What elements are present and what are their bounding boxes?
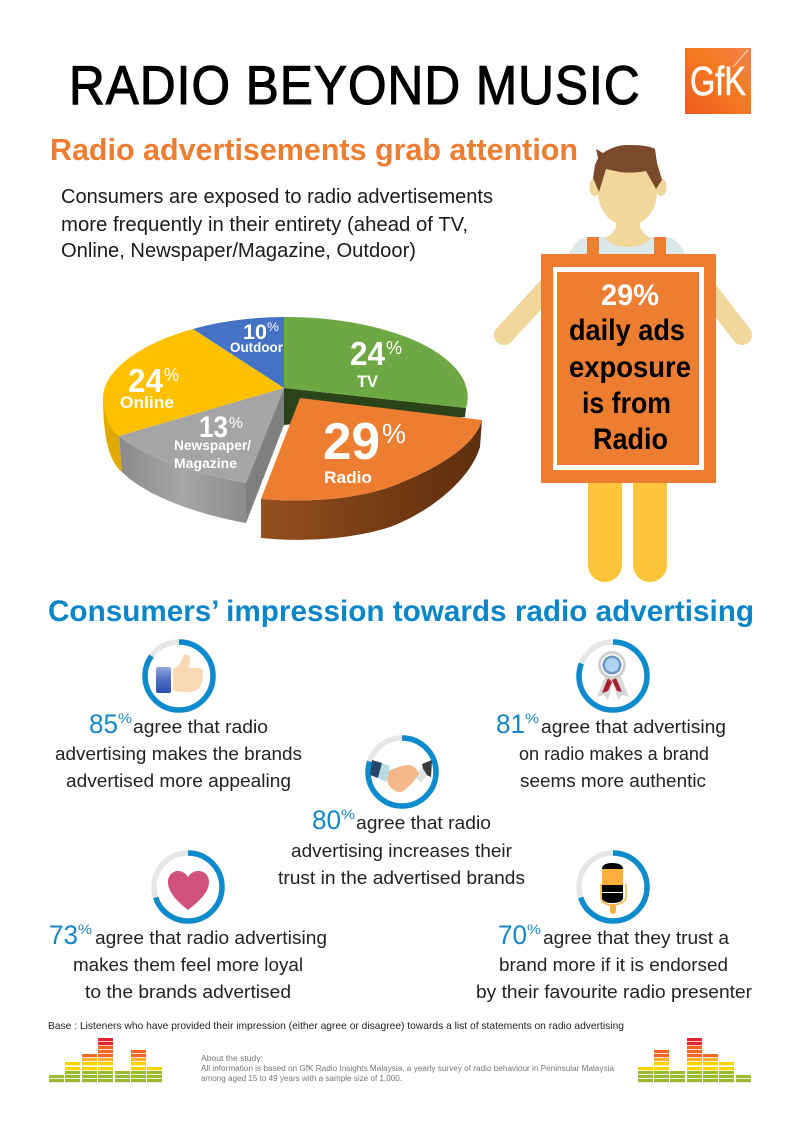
label: TV 24% bbox=[350, 335, 402, 391]
stat text: % bbox=[118, 710, 132, 726]
heading: radio advertisements: Radio advertisements grab attention bbox=[50, 132, 578, 167]
stat text: agree that radio bbox=[133, 717, 268, 737]
hair bbox=[593, 145, 662, 192]
stat text: on radio makes a brand bbox=[519, 744, 709, 764]
label: radio 29% bbox=[323, 413, 406, 487]
stat text: agree that radio bbox=[356, 813, 491, 833]
label: online 24%: Online bbox=[120, 393, 174, 412]
stat text: by their favourite radio presenter bbox=[476, 982, 752, 1002]
slice: radio bbox=[261, 398, 482, 540]
stat text: advertising increases their bbox=[291, 841, 512, 861]
stat: 85% more appealing bbox=[55, 642, 302, 791]
head bbox=[590, 165, 666, 226]
label: online 24%: % bbox=[164, 365, 179, 385]
stat text bbox=[476, 920, 752, 1002]
sign text: 29% bbox=[601, 279, 659, 312]
icon: heart ring bbox=[154, 853, 222, 921]
sign board bbox=[541, 254, 716, 483]
slice: TV bbox=[284, 317, 468, 425]
stat text: % bbox=[341, 806, 355, 822]
stat text: agree that radio advertising bbox=[95, 928, 327, 948]
stat text bbox=[278, 805, 525, 888]
stat: 70% presenter endorsement bbox=[476, 853, 752, 1002]
stat text: brand more if it is endorsed bbox=[499, 955, 728, 975]
stat text: % bbox=[527, 921, 541, 937]
label: outdoor 10%: Outdoor bbox=[230, 340, 284, 355]
stat text: agree that they trust a bbox=[543, 928, 730, 948]
label: TV 24%: 24 bbox=[350, 335, 386, 372]
stat text: agree that advertising bbox=[541, 717, 726, 737]
text block: about the study bbox=[201, 1054, 615, 1083]
icon: handshake ring bbox=[368, 738, 436, 806]
label: newspaper and magazine 13%: Newspaper/ bbox=[174, 438, 251, 453]
icon: left equalizer bars bbox=[49, 1038, 162, 1082]
label: newspaper and magazine 13%: Magazine bbox=[174, 456, 238, 471]
logo: GfK: GfK bbox=[690, 58, 746, 104]
label: newspaper and magazine 13%: 13 bbox=[199, 411, 228, 444]
heading: consumers' impression: Consumers’ impression towards radio advertising bbox=[48, 595, 754, 628]
stat text: 73 bbox=[49, 920, 78, 950]
stat text: % bbox=[78, 921, 92, 937]
logo: GfK bbox=[685, 48, 751, 114]
stat: 81% more authentic bbox=[496, 642, 726, 791]
label: radio 29%: % bbox=[382, 418, 406, 449]
stat text: seems more authentic bbox=[520, 771, 706, 791]
label: newspaper and magazine 13%: % bbox=[229, 415, 243, 432]
stat text: advertised more appealing bbox=[66, 771, 291, 791]
footnote: base: Base : Listeners who have provided their impression (either agree or disagree) towards a list of statements on radio advertising bbox=[48, 1020, 624, 1032]
label: online 24% bbox=[120, 362, 179, 412]
stat text: 85 bbox=[89, 709, 118, 739]
neck bbox=[605, 218, 651, 247]
icon: thumbs up ring bbox=[145, 642, 213, 710]
label: newspaper and magazine 13% bbox=[174, 411, 251, 471]
sign text: Radio bbox=[593, 423, 668, 456]
shirt bbox=[568, 237, 686, 256]
figure: person wearing sign board bbox=[504, 145, 742, 582]
stat: 73% more loyal bbox=[49, 853, 327, 1002]
stat: 80% increased trust bbox=[278, 738, 525, 888]
label: outdoor 10% bbox=[230, 320, 284, 355]
stat text: trust in the advertised brands bbox=[278, 868, 525, 888]
text block: exposure intro: Online, Newspaper/Magazine, Outdoor) bbox=[61, 240, 416, 262]
text block: exposure intro bbox=[61, 186, 493, 262]
text block: exposure intro: Consumers are exposed to radio advertisements bbox=[61, 186, 493, 208]
legs bbox=[588, 480, 667, 582]
title: RADIO BEYOND MUSIC bbox=[69, 56, 640, 117]
slice: outdoor bbox=[193, 317, 284, 388]
chart: 3D pie of daily ad exposure bbox=[103, 317, 482, 540]
stat text: makes them feel more loyal bbox=[73, 955, 303, 975]
icon: right equalizer bars bbox=[638, 1038, 751, 1082]
text block: exposure intro: more frequently in their entirety (ahead of TV, bbox=[61, 214, 468, 236]
label: TV 24%: TV bbox=[357, 372, 379, 391]
stat text: 70 bbox=[498, 920, 527, 950]
text block: about the study: All information is based on GfK Radio Insights Malaysia, a yearly survey of radio behaviour in Peninsular Malaysia bbox=[201, 1064, 615, 1073]
label: online 24%: 24 bbox=[128, 362, 164, 399]
slice: online bbox=[103, 329, 284, 472]
label: outdoor 10%: % bbox=[267, 320, 279, 334]
label: outdoor 10%: 10 bbox=[243, 321, 267, 344]
sign straps bbox=[587, 237, 666, 255]
stat text: 81 bbox=[496, 709, 525, 739]
arms bbox=[504, 287, 742, 335]
stat text: 80 bbox=[312, 805, 341, 835]
stat text bbox=[496, 709, 726, 791]
text block: about the study: About the study: bbox=[201, 1054, 263, 1063]
sign text: exposure bbox=[569, 351, 691, 384]
label: TV 24%: % bbox=[386, 338, 402, 358]
icon: microphone ring bbox=[579, 853, 647, 921]
label: radio 29%: Radio bbox=[324, 468, 372, 487]
stat text: advertising makes the brands bbox=[55, 744, 302, 764]
label: radio 29%: 29 bbox=[323, 413, 380, 471]
sign text: is from bbox=[582, 387, 671, 420]
stat text: % bbox=[525, 710, 539, 726]
slice: newspaper and magazine bbox=[119, 388, 284, 523]
stat text bbox=[55, 709, 302, 791]
stat text: to the brands advertised bbox=[85, 982, 291, 1002]
sign text: daily ads bbox=[569, 314, 685, 347]
text block: about the study: among aged 15 to 49 years with a sample size of 1,000. bbox=[201, 1074, 402, 1083]
stat text bbox=[49, 920, 327, 1002]
sign text bbox=[569, 279, 691, 456]
icon: award rosette ring bbox=[579, 642, 647, 710]
